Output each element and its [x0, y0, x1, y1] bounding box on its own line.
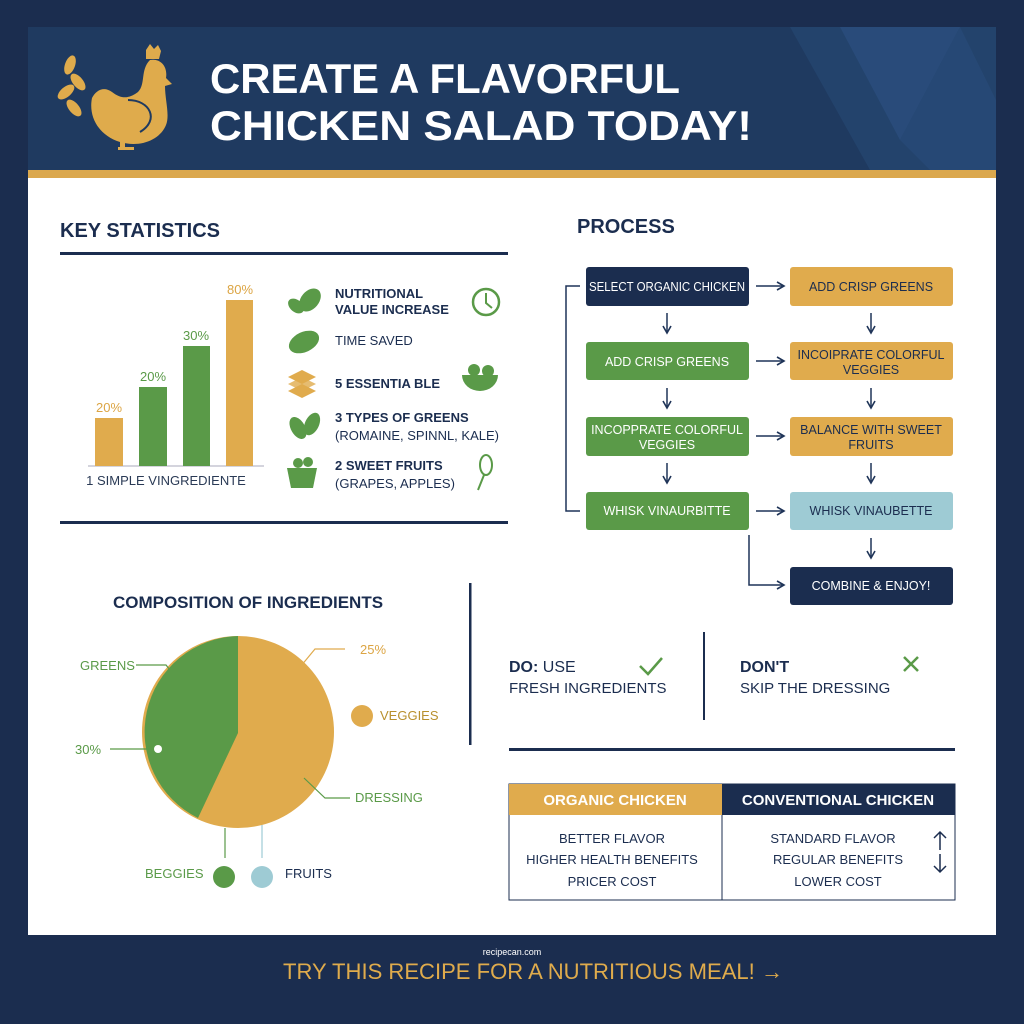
step boxes: BALANCE WITH SWEET: [800, 423, 942, 437]
title: CREATE A FLAVORFUL: [210, 55, 680, 102]
bar chart: [86, 282, 264, 488]
comparison table: HIGHER HEALTH BENEFITS: [526, 852, 698, 867]
pie chart: 30%: [75, 742, 101, 757]
bar chart: 30%: [183, 328, 209, 343]
comparison table: STANDARD FLAVOR: [770, 831, 896, 846]
step boxes: INCOIPRATE COLORFUL: [797, 348, 945, 362]
stats list: (ROMAINE, SPINNL, KALE): [335, 428, 499, 443]
step boxes: VEGGIES: [639, 438, 695, 452]
step boxes: ADD CRISP GREENS: [605, 355, 729, 369]
flowchart: [566, 267, 953, 605]
comparison table: ORGANIC CHICKEN: [543, 792, 687, 809]
stats list: VALUE INCREASE: [335, 302, 449, 317]
step boxes: WHISK VINAUBETTE: [810, 504, 932, 518]
heading: process: PROCESS: [577, 216, 675, 238]
pie chart: 25%: [360, 642, 386, 657]
icon: clock: [473, 289, 499, 315]
step boxes: VEGGIES: [843, 363, 899, 377]
do / dont: FRESH INGREDIENTS: [509, 680, 667, 697]
stats list: 3 TYPES OF GREENS: [335, 410, 469, 425]
icon: spinach: [286, 410, 323, 442]
main white panel: [28, 178, 996, 935]
comparison table: [509, 784, 955, 900]
comparison table: REGULAR BENEFITS: [773, 852, 903, 867]
title: [210, 55, 752, 149]
comparison table: CONVENTIONAL CHICKEN: [742, 792, 934, 809]
icon: apples: [351, 705, 373, 727]
step boxes: [586, 267, 953, 605]
stats list: [285, 284, 499, 491]
bar chart: 1 SIMPLE VINGREDIENTE: [86, 473, 246, 488]
bar chart: 80%: [227, 282, 253, 297]
stats list: 5 ESSENTIA BLE: [335, 376, 440, 391]
icon: layers: [288, 370, 316, 398]
step boxes: COMBINE & ENJOY!: [812, 579, 930, 593]
icon: leaves: [285, 284, 325, 316]
step boxes: FRUITS: [848, 438, 894, 452]
comparison table: LOWER COST: [794, 874, 882, 889]
pie chart: FRUITS: [285, 866, 332, 881]
pie chart: GREENS: [80, 658, 135, 673]
stats list: NUTRITIONAL: [335, 286, 423, 301]
heading: composition: COMPOSITION OF INGREDIENTS: [113, 593, 383, 612]
step boxes: SELECT ORGANIC CHICKEN: [589, 280, 745, 294]
icon: leaf: [285, 326, 323, 358]
pie chart: VEGGIES: [380, 708, 439, 723]
stats list: 2 SWEET FRUITS: [335, 458, 443, 473]
comparison table: BETTER FLAVOR: [559, 831, 665, 846]
step boxes: INCOPPRATE COLORFUL: [591, 423, 743, 437]
pie chart: DRESSING: [355, 790, 423, 805]
heading: key statistics: KEY STATISTICS: [60, 220, 220, 242]
icon: chicken: [55, 44, 172, 150]
step boxes: WHISK VINAURBITTE: [603, 504, 731, 518]
do / dont: DON'T: [740, 659, 789, 676]
divider: [469, 583, 472, 745]
icon: basket: [287, 457, 317, 488]
do / dont: [509, 632, 918, 720]
bar chart: 20%: [140, 369, 166, 384]
icon: bowl: [462, 364, 498, 391]
stats list: (GRAPES, APPLES): [335, 476, 455, 491]
stats list: TIME SAVED: [335, 333, 413, 348]
bar chart: 20%: [96, 400, 122, 415]
header panel: [28, 27, 996, 178]
do / dont: SKIP THE DRESSING: [740, 680, 890, 697]
pie chart: [75, 636, 439, 888]
step boxes: ADD CRISP GREENS: [809, 280, 933, 294]
icon: whisk: [478, 455, 492, 490]
pie chart: BEGGIES: [145, 866, 204, 881]
title: CHICKEN SALAD TODAY!: [210, 102, 752, 149]
do / dont: DO: USE: [509, 659, 576, 676]
comparison table: PRICER COST: [568, 874, 656, 889]
watermark: recipecan.com: [483, 947, 541, 957]
footer call to action: TRY THIS RECIPE FOR A NUTRITIOUS MEAL! →: [283, 959, 783, 984]
